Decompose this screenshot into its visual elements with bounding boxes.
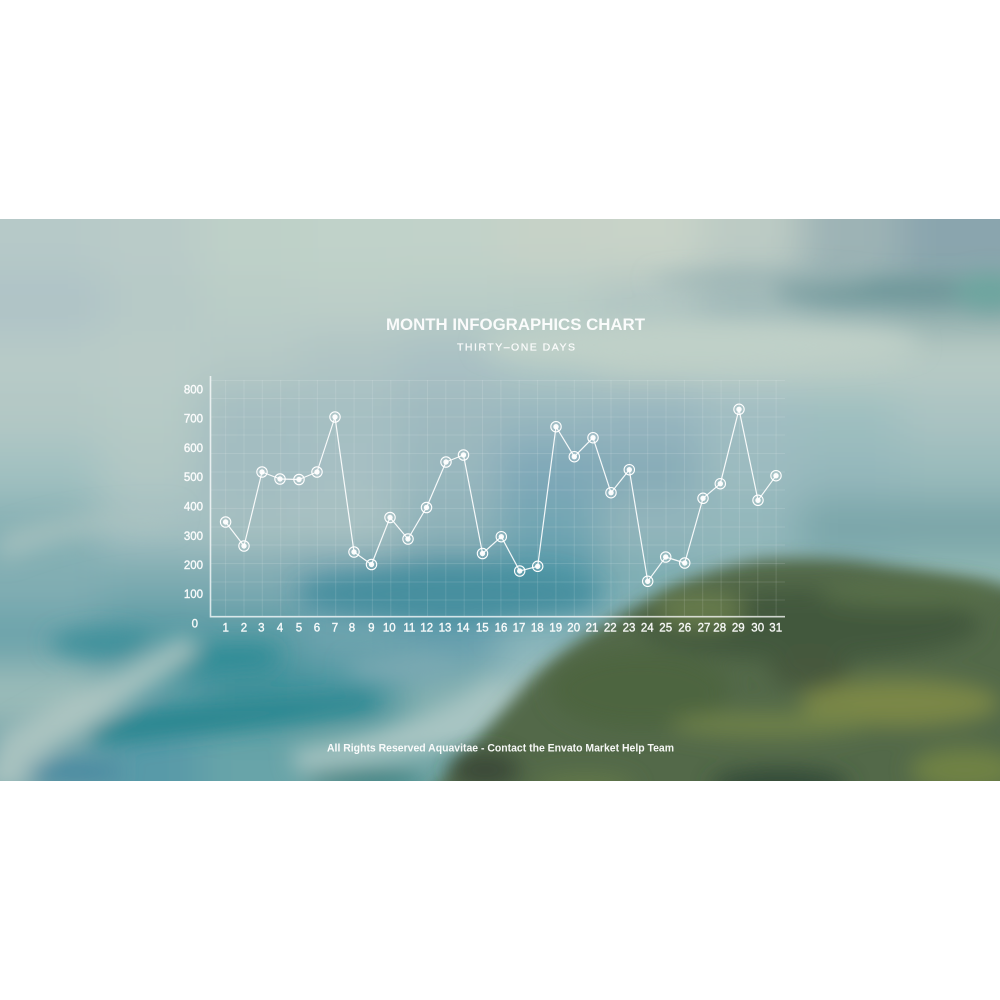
- x axis labels: 29: [732, 622, 745, 634]
- x axis labels: 23: [623, 622, 635, 634]
- x axis labels: 12: [420, 622, 433, 634]
- x axis labels: 8: [349, 622, 355, 634]
- x axis labels: 27: [698, 622, 710, 634]
- x axis labels: 25: [659, 622, 672, 634]
- x axis labels: 11: [403, 622, 415, 634]
- y axis labels: 800: [184, 384, 203, 396]
- x axis labels: 9: [368, 622, 375, 634]
- x axis labels: 31: [769, 622, 782, 634]
- x axis labels: 26: [678, 622, 691, 634]
- x axis labels: 5: [296, 622, 302, 634]
- y axis labels: 300: [184, 531, 203, 543]
- x axis labels: 14: [457, 622, 470, 634]
- chart axes: [210, 376, 785, 617]
- x axis labels: [222, 622, 782, 634]
- y axis labels: 400: [184, 502, 203, 514]
- x axis labels: 16: [495, 622, 507, 634]
- x axis labels: 3: [258, 622, 265, 634]
- footer credit: All Rights Reserved Aquavitae - Contact the Envato Market Help Team: [327, 742, 674, 754]
- y axis labels: 700: [184, 414, 203, 426]
- blurred landscape background photo: [0, 219, 1000, 781]
- x axis labels: 1: [222, 622, 229, 634]
- x axis labels: 6: [314, 622, 320, 634]
- y axis labels: 500: [184, 472, 203, 484]
- y axis labels: 0: [192, 618, 198, 630]
- x axis labels: 7: [332, 622, 338, 634]
- x axis labels: 21: [586, 622, 598, 634]
- x axis labels: 18: [531, 622, 544, 634]
- x axis labels: 20: [567, 622, 580, 634]
- y axis labels: 200: [184, 560, 203, 572]
- x axis labels: 2: [241, 622, 247, 634]
- title: MONTH INFOGRAPHICS CHART: [386, 315, 646, 334]
- x axis labels: 22: [604, 622, 617, 634]
- x axis labels: 4: [277, 622, 284, 634]
- x axis labels: 17: [513, 622, 525, 634]
- x axis labels: 15: [476, 622, 489, 634]
- y axis labels: 100: [184, 589, 203, 601]
- data point dots: [223, 407, 779, 584]
- y axis labels: [184, 384, 203, 630]
- x axis labels: 24: [641, 622, 654, 634]
- x axis labels: 19: [549, 622, 562, 634]
- x axis labels: 10: [383, 622, 396, 634]
- data point rings: [220, 404, 781, 586]
- x axis labels: 13: [439, 622, 451, 634]
- y axis labels: 600: [184, 443, 203, 455]
- subtitle: THIRTY–ONE DAYS: [457, 342, 575, 354]
- data line: [226, 409, 776, 581]
- x axis labels: 30: [751, 622, 764, 634]
- x axis labels: 28: [713, 622, 726, 634]
- chart grid: [211, 380, 785, 616]
- line chart: [184, 376, 785, 634]
